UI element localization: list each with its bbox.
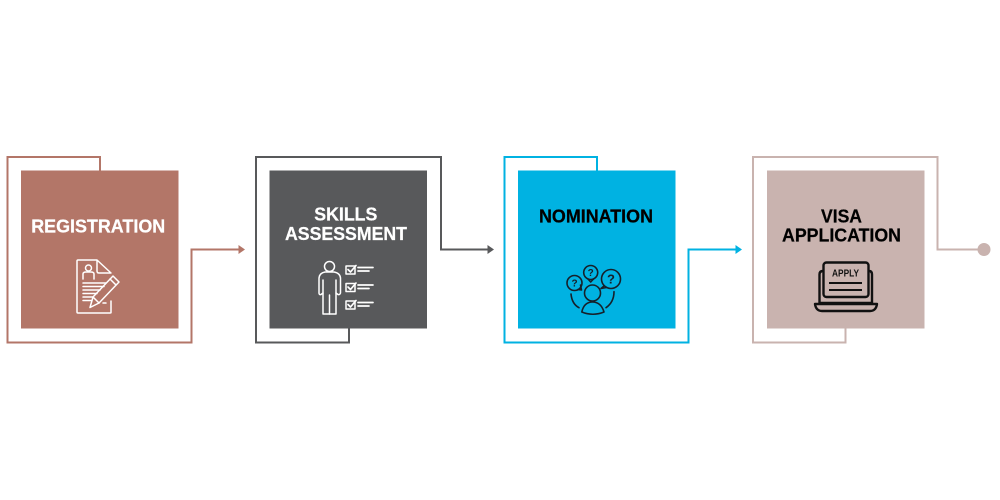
icon: laptop with apply form: APPLY xyxy=(832,269,859,280)
icon: laptop with apply form xyxy=(815,262,877,311)
heading: visa application xyxy=(782,206,901,246)
icon text: question marks: ? xyxy=(571,278,578,290)
heading: visa application: APPLICATION xyxy=(782,226,901,246)
icon: person with question bubbles xyxy=(567,266,620,314)
icon text: question marks: ? xyxy=(607,272,615,286)
heading: visa application: VISA xyxy=(821,206,862,226)
connector frame and arrow 2 xyxy=(256,157,494,342)
icon: document with pencil xyxy=(77,260,119,313)
heading: skills assessment: ASSESSMENT xyxy=(285,224,407,244)
panel: visa application xyxy=(767,170,924,328)
icon text: question marks xyxy=(571,268,615,290)
step 2: skills assessment xyxy=(256,157,494,342)
panel: registration xyxy=(21,170,178,328)
connector frame and arrow 3 xyxy=(504,157,742,342)
heading: skills assessment xyxy=(285,205,407,244)
step 3: nomination xyxy=(504,157,742,342)
panel: skills assessment xyxy=(270,170,427,328)
icon text: question marks: ? xyxy=(588,268,594,279)
heading: registration: REGISTRATION xyxy=(31,216,165,236)
panel: nomination xyxy=(518,170,676,328)
step 1: registration xyxy=(8,157,245,342)
step 4: visa application xyxy=(753,157,990,342)
icon: person with checklist xyxy=(319,262,373,314)
connector frame and end dot xyxy=(753,157,990,342)
connector frame and arrow 1 xyxy=(8,157,245,342)
heading: nomination: NOMINATION xyxy=(539,206,653,226)
heading: skills assessment: SKILLS xyxy=(314,205,377,225)
